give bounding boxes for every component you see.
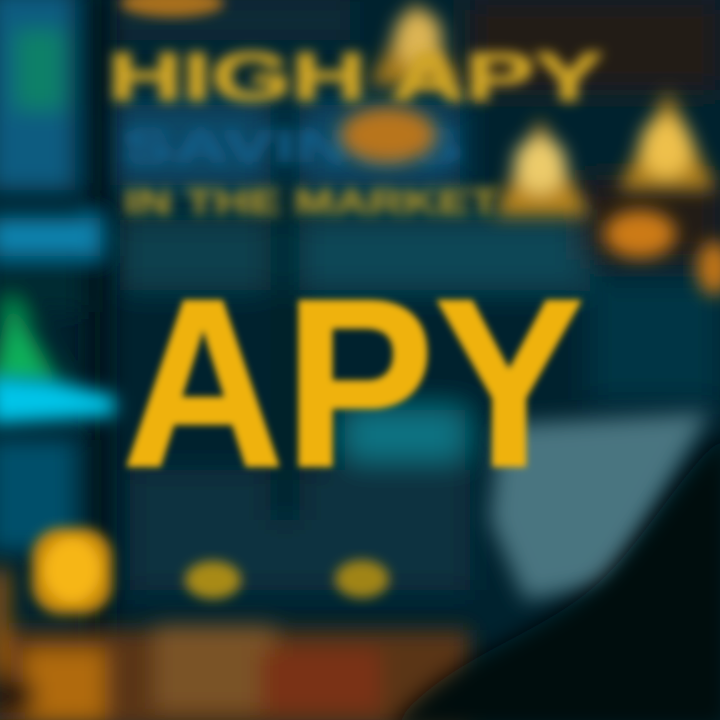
icon: small yellow light bbox=[335, 560, 389, 598]
panel: wooden bottom band bbox=[0, 570, 470, 720]
panel: cyan left glow bbox=[0, 376, 115, 424]
panel: left window strip bbox=[0, 0, 110, 710]
heading: big APY: APY bbox=[122, 249, 584, 517]
silhouette: dark foreground shape bbox=[390, 430, 720, 720]
icon: hanging lamp lower glow bbox=[340, 107, 436, 163]
icon: lamp glow right bbox=[604, 210, 676, 258]
icon: glowing lantern bottom left bbox=[32, 528, 112, 614]
icon: lamp glow edge bbox=[697, 241, 720, 295]
icon: top glow bbox=[120, 0, 224, 17]
panel: grey-teal glass table bbox=[490, 412, 710, 600]
subtitle: yellow line: IN THE MARKET bbox=[124, 181, 499, 222]
title: HIGH APY bbox=[108, 39, 603, 115]
subtitle: blurred line: SAVINGS bbox=[122, 120, 462, 172]
icon: hanging lamp top centre bbox=[368, 0, 462, 85]
icon: hanging lamp centre right bbox=[493, 118, 590, 216]
icon: hanging lamp far right bbox=[618, 90, 716, 190]
icon: small yellow light bbox=[185, 561, 241, 599]
